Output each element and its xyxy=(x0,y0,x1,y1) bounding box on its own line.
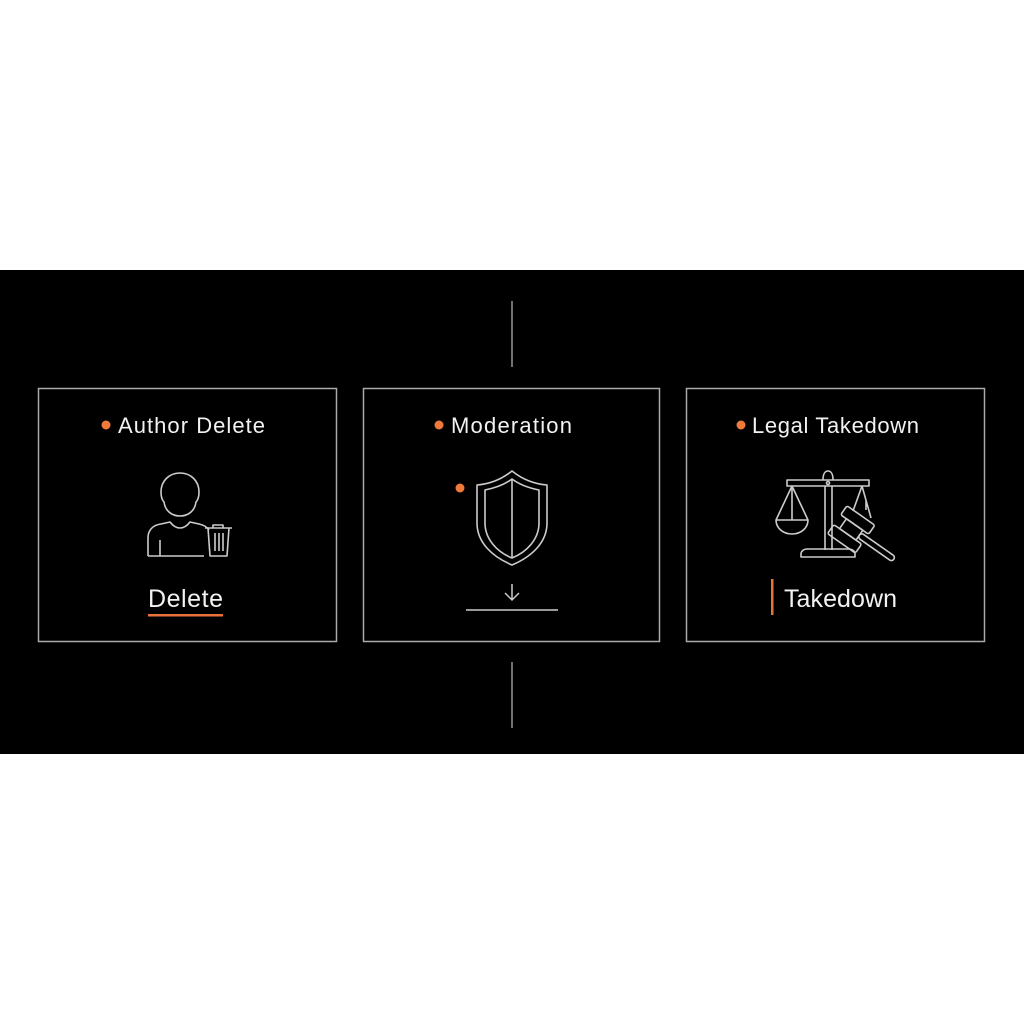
heading: legal takedown: Legal Takedown xyxy=(752,413,919,438)
heading: author delete: Author Delete xyxy=(118,413,265,438)
icon: down arrow with line xyxy=(466,584,558,610)
panel: moderation xyxy=(364,388,660,642)
label: takedown: Takedown xyxy=(784,585,897,613)
heading: moderation: Moderation xyxy=(451,413,572,438)
panel: author delete xyxy=(38,388,336,642)
label: takedown xyxy=(771,579,897,615)
panel: legal takedown xyxy=(686,388,984,642)
orange dot xyxy=(456,484,464,492)
label: delete: Delete xyxy=(148,585,223,613)
icon: scales and gavel xyxy=(776,471,904,573)
connector line bottom xyxy=(511,662,513,728)
connector line top xyxy=(511,301,513,367)
black band background xyxy=(0,270,1024,754)
icon: shield xyxy=(477,471,547,565)
icon: person with trash xyxy=(148,473,232,556)
